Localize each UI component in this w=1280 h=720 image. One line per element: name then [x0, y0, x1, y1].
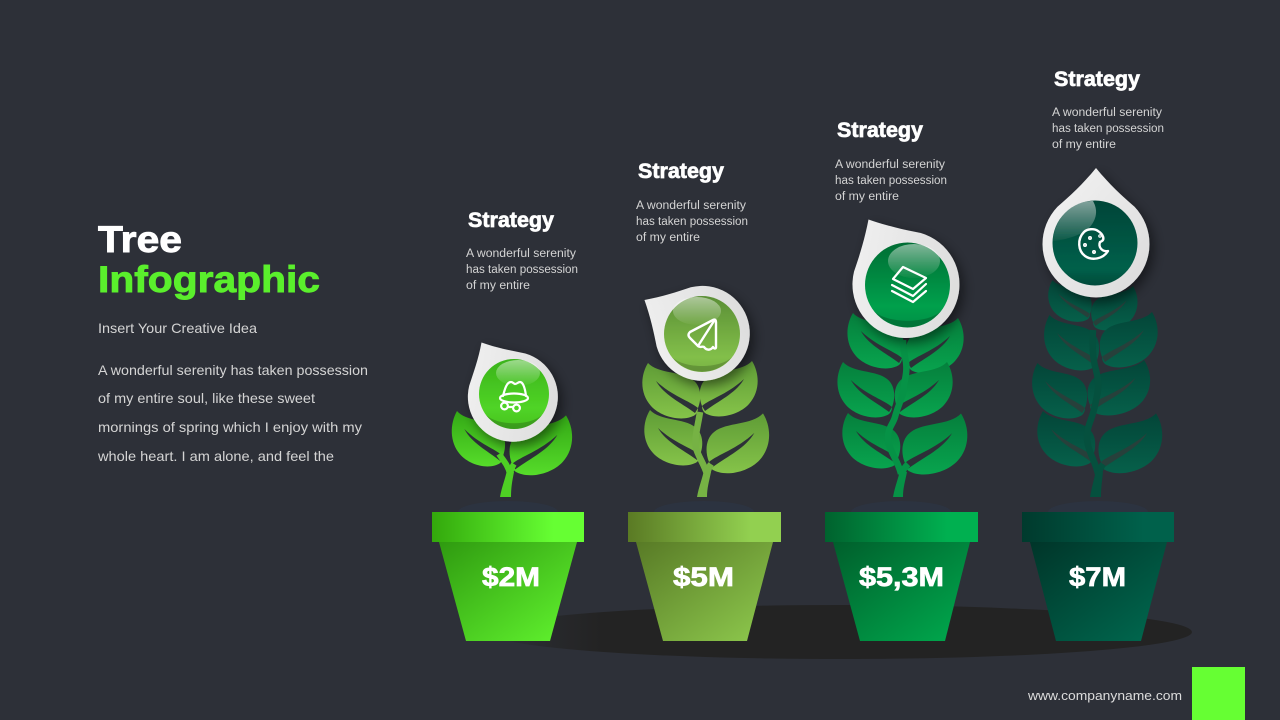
description 2: [636, 200, 748, 244]
ground shadow: [488, 605, 1192, 659]
title: Tree: [98, 219, 182, 260]
pin 3: [822, 193, 979, 358]
description 1: of my entire: [466, 280, 530, 292]
icon: spy hat: [500, 382, 528, 411]
column 3: $5,3M: [822, 119, 979, 641]
body text: whole heart. I am alone, and feel the: [97, 448, 334, 464]
plant 3: [837, 313, 967, 497]
description 1: [466, 248, 578, 292]
description 3: [835, 159, 947, 203]
title: Infographic: [98, 259, 320, 300]
description 1: A wonderful serenity: [466, 248, 576, 260]
body text: of my entire soul, like these sweet: [98, 390, 315, 406]
pot 2: [628, 501, 781, 641]
subtitle: Insert Your Creative Idea: [98, 320, 257, 336]
description 2: A wonderful serenity: [636, 200, 746, 212]
description 4: [1052, 107, 1164, 151]
description 3: has taken possession: [835, 175, 947, 187]
description 4: has taken possession: [1052, 123, 1164, 135]
description 3: A wonderful serenity: [835, 159, 945, 171]
pot 1: [432, 501, 584, 641]
footer green square: [1192, 667, 1245, 720]
heading: strategy 3: Strategy: [837, 119, 923, 142]
pot 4: [1022, 501, 1174, 641]
description 2: has taken possession: [636, 216, 748, 228]
pot 3: [825, 501, 978, 641]
pin 1: [443, 320, 574, 458]
pin 4: [1042, 168, 1150, 297]
value 2: $5M: [673, 562, 734, 592]
description 1: has taken possession: [466, 264, 578, 276]
title: [98, 219, 320, 300]
body text: [97, 362, 368, 464]
body text: A wonderful serenity has taken possession: [98, 362, 368, 378]
description 3: of my entire: [835, 191, 899, 203]
heading: strategy 1: Strategy: [468, 209, 554, 232]
plant 4: [1032, 280, 1162, 497]
description 2: of my entire: [636, 232, 700, 244]
heading: strategy 4: Strategy: [1054, 68, 1140, 91]
footer website: www.companyname.com: [1027, 688, 1182, 703]
icon: cookie: [1079, 229, 1108, 259]
value 4: $7M: [1069, 562, 1126, 592]
column 2: $5M: [621, 160, 781, 641]
column 1: $2M: [432, 209, 584, 641]
body text: mornings of spring which I enjoy with my: [98, 419, 362, 435]
pin 2: [621, 259, 767, 398]
plant 2: [642, 361, 769, 497]
heading: strategy 2: Strategy: [638, 160, 724, 183]
icon: paper plane: [688, 320, 716, 350]
column 4: $7M: [1022, 68, 1174, 641]
value 3: $5,3M: [859, 562, 944, 592]
icon: layers: [892, 267, 926, 302]
plant 1: [452, 411, 572, 497]
description 4: of my entire: [1052, 139, 1116, 151]
description 4: A wonderful serenity: [1052, 107, 1162, 119]
value 1: $2M: [482, 562, 540, 592]
